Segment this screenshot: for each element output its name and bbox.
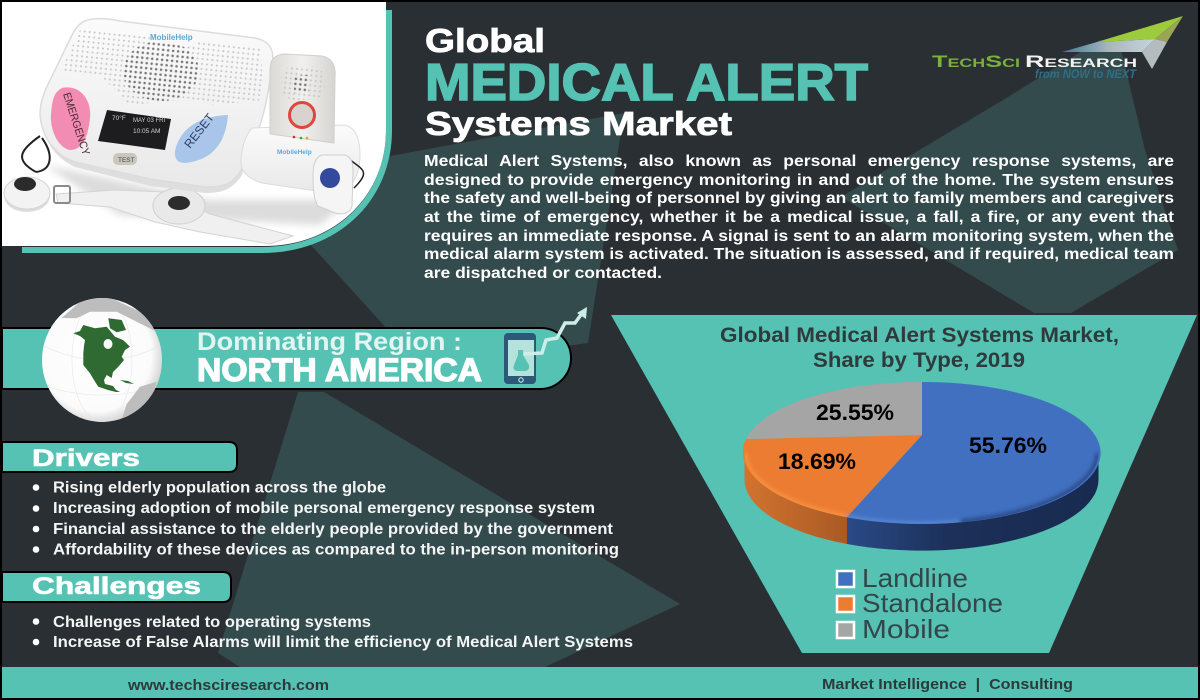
chart legend <box>837 563 1003 644</box>
logo: TechSci Research: Research <box>1025 52 1137 71</box>
icon: test button: TEST <box>118 157 135 164</box>
description paragraph: the safety and well-being of personnel by giving an alert to family members and caregivers <box>424 190 1174 207</box>
description paragraph: at the time of emergency, whether it be a medical issue, a fall, a fire, or any event that <box>424 209 1175 226</box>
title <box>425 22 868 142</box>
drivers heading: Drivers <box>32 445 140 472</box>
title: Global <box>425 22 545 59</box>
logo: TechSci Research: TechSci <box>932 52 1020 71</box>
icon: blue button pendant <box>313 155 364 214</box>
pie chart: 25.55% <box>816 400 894 425</box>
product photo panel <box>2 2 389 250</box>
logo: TechSci Research <box>932 16 1183 81</box>
icon: emergency button: EMERGENCY <box>60 91 92 157</box>
pie chart <box>743 382 1101 551</box>
description paragraph: designed to provide emergency monitoring in and out of the home. The system ensures <box>424 172 1174 189</box>
icon: main base unit <box>40 19 273 193</box>
footer bar <box>2 667 1198 698</box>
description paragraph: requires an immediate response. A signal is sent to an alarm monitoring system, when the <box>424 228 1174 245</box>
challenges heading <box>2 572 231 602</box>
icon: charging base <box>241 125 360 193</box>
title: Systems Market <box>425 105 732 142</box>
icon: charging base: MobileHelp <box>277 149 312 156</box>
icon: test button <box>113 153 137 165</box>
icon: wrist band <box>54 186 293 244</box>
region banner <box>2 307 587 389</box>
icon: neck pendant <box>4 136 50 212</box>
region label: Dominating Region : <box>197 328 462 356</box>
drivers list: Financial assistance to the elderly people provided by the government <box>53 521 614 538</box>
product shadows <box>45 165 350 225</box>
background shapes <box>218 40 1178 667</box>
icon: phone with rising arrow <box>504 307 587 384</box>
icon: mobile pendant unit <box>270 54 335 143</box>
drivers list: Affordability of these devices as compared to the in-person monitoring <box>53 542 619 558</box>
challenges list: Increase of False Alarms will limit the efficiency of Medical Alert Systems <box>53 634 633 651</box>
pie chart: 55.76% <box>969 433 1047 458</box>
chart legend: Landline <box>862 563 968 593</box>
pie chart: 18.69% <box>778 449 856 474</box>
footer tagline: Market Intelligence | Consulting <box>822 676 1073 693</box>
icon: display screen: 10:05 AM <box>133 128 160 135</box>
icon: reset button <box>175 110 228 163</box>
chart legend: Mobile <box>862 614 950 644</box>
description paragraph <box>424 153 1175 282</box>
challenges list: Challenges related to operating systems <box>53 614 371 631</box>
drivers list <box>33 480 619 558</box>
chart panel <box>611 315 1197 653</box>
land masses in grey <box>62 298 156 418</box>
logo: TechSci Research: from NOW to NEXT <box>1035 69 1137 81</box>
footer website: www.techsciresearch.com <box>127 677 329 694</box>
challenges heading: Challenges <box>32 573 201 600</box>
region name: NORTH AMERICA <box>197 352 482 388</box>
chart title <box>720 324 1119 372</box>
land: North America in green <box>73 318 134 392</box>
globe: North America <box>42 296 164 425</box>
drivers heading <box>2 442 237 472</box>
brand label: MobileHelp <box>150 33 193 42</box>
description paragraph: medical alarm system is activated. The situation is assessed, and if required, medical team <box>424 246 1174 263</box>
drivers list: Increasing adoption of mobile personal emergency response system <box>53 500 595 517</box>
title: MEDICAL ALERT <box>425 54 868 112</box>
icon: reset button: RESET <box>181 110 217 151</box>
icon: display screen: MAY 03 FRI <box>133 118 165 124</box>
chart legend: Standalone <box>862 588 1003 618</box>
challenges list <box>33 614 633 651</box>
description paragraph: Medical Alert Systems, also known as personal emergency response systems, are <box>424 153 1174 170</box>
teal photo frame <box>22 10 389 250</box>
icon: display screen <box>98 110 171 150</box>
chart title: Share by Type, 2019 <box>813 349 1025 372</box>
description paragraph: are dispatched or contacted. <box>424 265 662 282</box>
chart title: Global Medical Alert Systems Market, <box>720 324 1119 347</box>
icon: display screen: 70°F <box>112 114 126 122</box>
drivers list: Rising elderly population across the globe <box>53 480 386 496</box>
